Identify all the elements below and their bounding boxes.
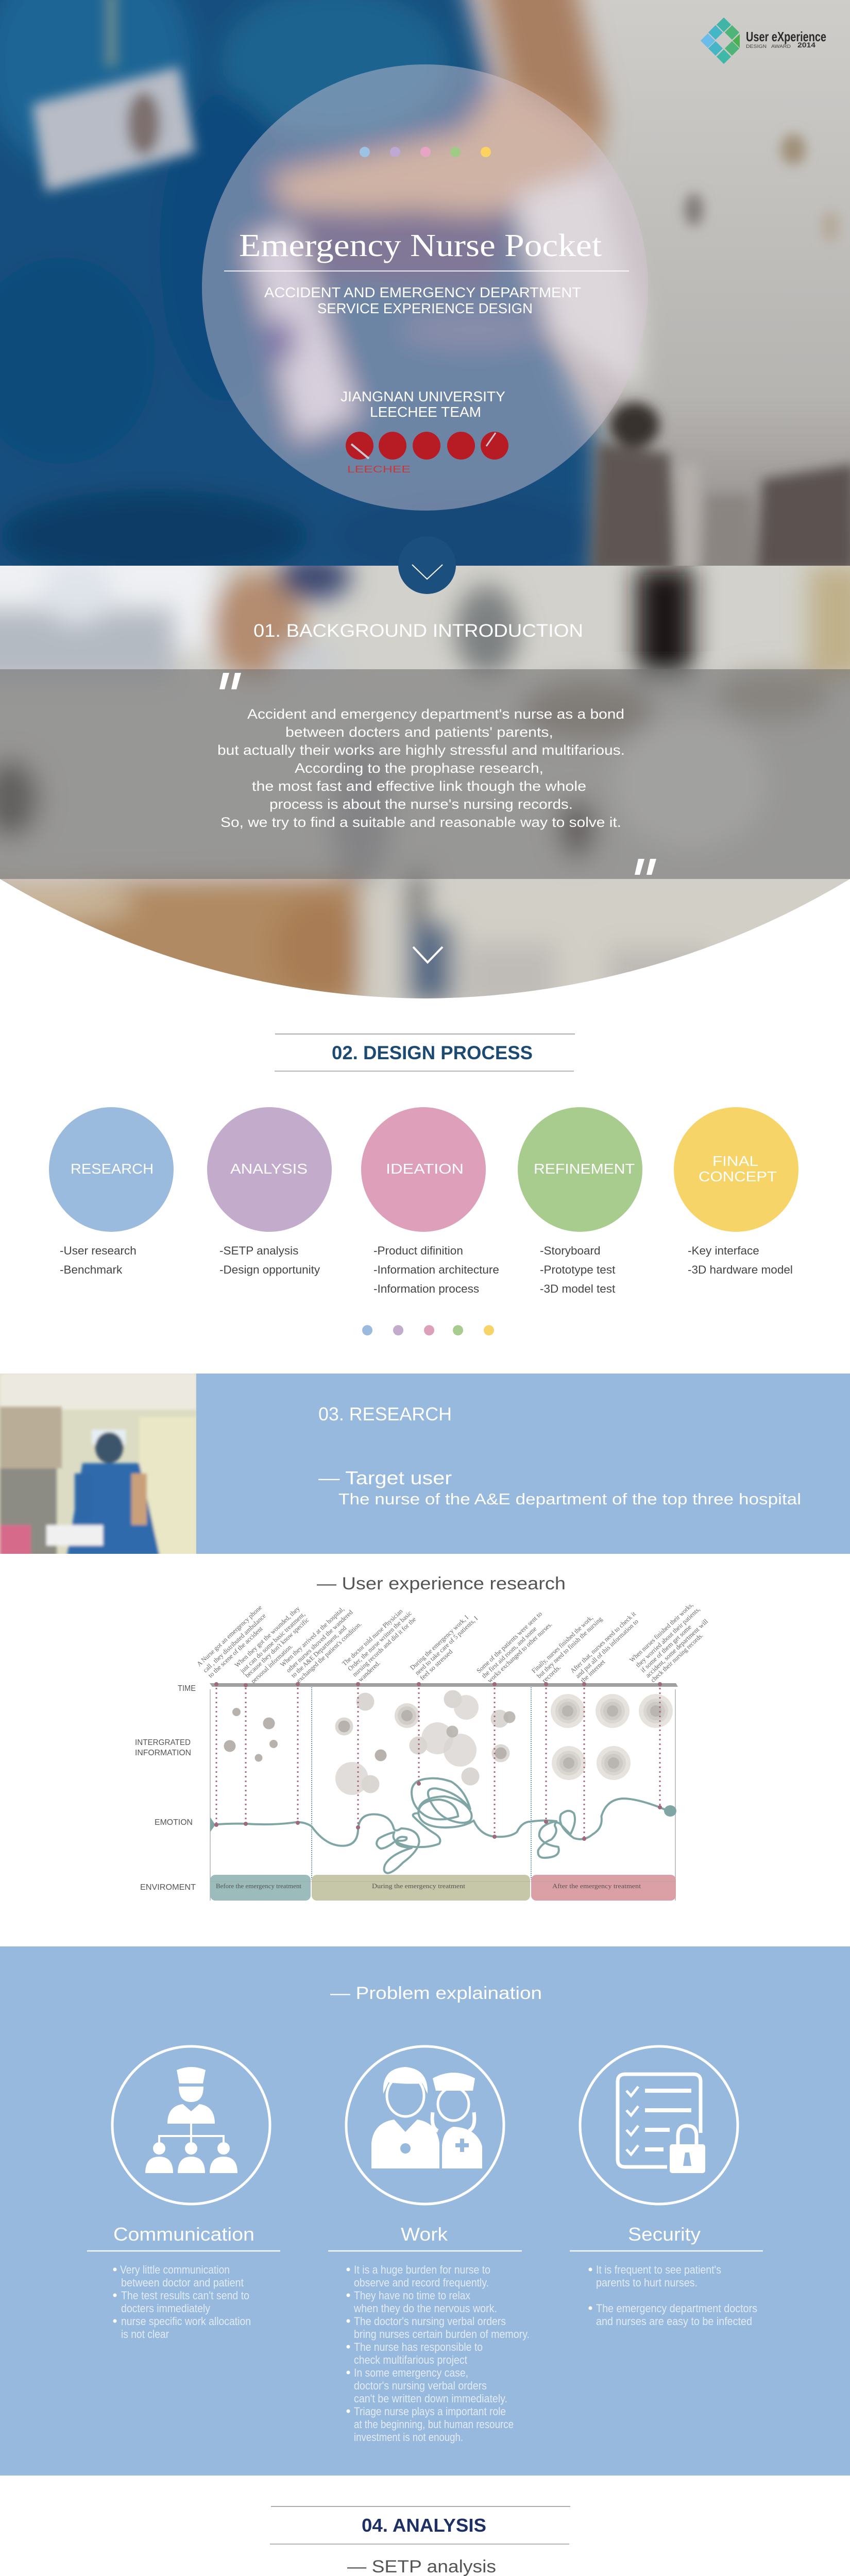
column: work [328,2224,530,2444]
integrated information bubbles [224,1690,673,1795]
step: research [49,1107,174,1232]
column: work: when they do the nervous work. [353,2302,497,2315]
research details: -Benchmark [60,1263,123,1276]
event annotations: personal information. [249,1642,294,1685]
ideation details: -Information process [373,1282,479,1295]
event annotations: but they need to finish the nursing [535,1615,604,1680]
icon: security [580,2046,738,2204]
column: communication: nurse specific work allocation [121,2315,251,2328]
translucent circle [202,64,648,511]
column: work: doctor's nursing verbal orders [354,2379,487,2392]
final concept details: -Key interface [688,1244,759,1257]
final concept details [688,1244,793,1276]
column: security: Security [628,2224,701,2245]
step: ideation [361,1107,486,1232]
column: security: and nurses are easy to be infected [596,2315,752,2328]
event annotations: because they don't know specific [243,1616,311,1679]
column: work: bring nurses certain burden of memory. [354,2328,530,2341]
icon: down chevron [413,947,443,962]
refinement details: -Storyboard [540,1244,601,1257]
row labels: ENVIROMENT [140,1883,196,1892]
ideation details [373,1244,499,1295]
event annotations: exchanged the patient's condition. [295,1620,363,1684]
row labels: TIME [178,1684,196,1693]
column: communication: docters immediately [121,2302,210,2315]
top chevron badge [398,536,456,594]
photo: nurse at work [0,1374,196,1556]
column: security [570,2224,763,2328]
event annotations: The doctor told nurse Physician [341,1607,404,1667]
heading: 02 design process: 02. DESIGN PROCESS [332,1042,533,1063]
step: analysis: ANALYSIS [230,1161,308,1177]
icon: User eXperience Design Award logo: 2014 [797,41,815,49]
row labels: INFORMATION [135,1749,191,1757]
column: work: can't be written down immediately. [354,2392,507,2405]
column: security: It is frequent to see patient's [596,2263,721,2276]
target user description: The nurse of the A&E department of the top three hospital [338,1490,801,1508]
frame lines [210,1687,675,1901]
environment bars [210,1875,676,1901]
event annotations: accident, some department will [644,1617,709,1679]
refinement details [540,1244,616,1295]
column: communication: is not clear [121,2328,169,2341]
chart: user experience journey map [135,1601,709,1901]
event annotations: feel so stressed [418,1648,454,1682]
event annotations: wandered. [356,1659,382,1683]
event annotations: the first aid room, and some [480,1625,538,1680]
environment bars: After the emergency treatment [552,1882,641,1890]
section photo background [0,546,850,1015]
emotion curve [210,1778,676,1873]
event annotations: works exchanged to other nurses. [486,1620,553,1684]
event annotations: if some of them get some [639,1623,693,1674]
column: work: observe and record frequently. [354,2276,489,2289]
column: work: They have no time to relax [354,2289,470,2302]
column: communication: The test results can't send to [121,2289,249,2302]
icon: work [346,2046,504,2204]
research details: -User research [60,1244,137,1257]
panel: 04 analysis [79,2506,806,2576]
event annotations: they worried about their patients, [634,1605,702,1669]
title: Emergency Nurse Pocket [239,228,602,263]
step: analysis [207,1107,332,1232]
icon: User eXperience Design Award logo: AWARD [771,44,791,49]
panel: 03 research banner [0,1374,850,1556]
background text: the most fast and effective link though the whole [252,778,586,794]
icon: opening quote mark [219,673,241,689]
column: work: Work [401,2224,448,2245]
background text: Accident and emergency department's nurse as a bond [247,706,624,722]
final concept details: -3D hardware model [688,1263,793,1276]
background text: So, we try to find a suitable and reasonable way to solve it. [220,815,621,830]
event annotations: other nurses shoved the wandered [284,1608,354,1674]
step: final concept: CONCEPT [699,1168,777,1184]
icon: closing quote mark [635,859,656,875]
event annotations: When nurses finished their works, [628,1601,694,1664]
time axis with event markers [210,1682,678,1841]
icon: User eXperience Design Award logo: User eXperience [746,29,826,44]
grey text band [0,669,850,879]
event annotations: Order, the nurse written the basic [346,1609,413,1672]
subtitle: SERVICE EXPERIENCE DESIGN [317,300,533,316]
step: research: RESEARCH [71,1161,154,1177]
event annotations: to the A&E Department, and [290,1624,348,1679]
panel: hero [0,0,850,618]
event annotations: records. [540,1663,562,1684]
team credit [341,388,505,420]
subtitle: ACCIDENT AND EMERGENCY DEPARTMENT [264,284,581,300]
step: refinement [518,1107,642,1232]
five coloured dots [362,1325,494,1335]
column: work: check multifarious project [354,2353,467,2366]
icon: Leechee logo [346,432,508,474]
panel: 01 background introduction [0,536,850,1015]
row labels: EMOTION [155,1818,193,1827]
analysis details [219,1244,320,1276]
event annotations: When they arrived at the hospital, [279,1605,346,1668]
ideation details: -Information architecture [373,1263,499,1276]
event annotations: just can do some basic treatment, [238,1610,307,1675]
event annotations: During the emergency work, I [409,1614,470,1671]
target user label: — Target user [318,1467,452,1488]
event annotations: Some of the patients were sent to [475,1610,543,1674]
column: communication: between doctor and patient [121,2276,244,2289]
environment bars: Before the emergency treatment [216,1882,301,1890]
research details [60,1244,137,1276]
column: work: Triage nurse plays a important role [354,2405,506,2418]
column: security: parents to hurt nurses. [596,2276,698,2289]
event annotations: After that, nurses need to check it [569,1609,637,1674]
background text: process is about the nurse's nursing records. [269,796,573,812]
icon: communication [112,2046,270,2204]
event annotations: to the scene of the accident [207,1624,264,1679]
background text: According to the prophase research, [295,760,543,776]
refinement details: -Prototype test [540,1263,616,1276]
event annotations: the internet [579,1658,606,1684]
background text: but actually their works are highly stressful and multifarious. [217,742,625,758]
column: work: The nurse has responsible to [354,2341,483,2353]
panel: problem explanation [0,1946,850,2476]
subtitle [264,284,581,316]
event annotations: nursing records and did it for the [351,1615,417,1678]
environment bars: During the emergency treatment [372,1882,465,1890]
step: refinement: REFINEMENT [534,1161,635,1177]
heading: 04 analysis: 04. ANALYSIS [362,2515,486,2536]
column: security: The emergency department doctors [596,2302,757,2315]
event annotations: check their nursing records. [649,1632,704,1684]
icon: User eXperience Design Award logo [701,18,826,64]
column: work: In some emergency case, [354,2366,468,2379]
column: communication: Communication [113,2224,254,2245]
event annotations: and put all of this information to [574,1617,640,1680]
heading: user experience research: — User experience research [317,1574,566,1594]
ideation details: -Product difinition [373,1244,463,1257]
event annotations [195,1601,709,1685]
step: ideation: IDEATION [386,1161,464,1177]
event annotations: call , they distributed ambulance [201,1612,267,1674]
column: communication: Very little communication [120,2263,230,2276]
team credit: JIANGNAN UNIVERSITY [341,388,505,404]
event annotations: A Nurse got an emergency phone [195,1603,263,1668]
panel: 02 design process [49,1034,798,1335]
column: work: investment is not enough. [354,2431,463,2444]
column: work: It is a huge burden for nurse to [354,2263,490,2276]
row labels [135,1684,196,1892]
analysis details: -SETP analysis [219,1244,298,1257]
team credit: LEECHEE TEAM [370,404,481,420]
row labels: INTERGRATED [135,1738,191,1747]
column: communication [87,2224,280,2341]
subheading: SETP analysis: — SETP analysis [347,2557,496,2576]
background text [217,706,625,830]
analysis details: -Design opportunity [219,1263,320,1276]
heading: 03 research: 03. RESEARCH [318,1403,452,1425]
heading: problem explaination: — Problem explaination [330,1984,542,2003]
column: work: at the beginning, but human resource [354,2418,514,2431]
five coloured dots [360,147,491,157]
step: final concept: FINAL [712,1153,758,1169]
event annotations: When they got the wounded, they [233,1604,301,1669]
event annotations: need to take care of 5 patients, I [413,1614,479,1676]
column: work: The doctor's nursing verbal orders [354,2315,506,2328]
icon: Leechee logo: LEECHEE [347,464,411,474]
step: final concept [674,1107,798,1232]
background text: between docters and patients' parents, [285,724,553,740]
heading: 01 background introduction: 01. BACKGROUND INTRODUCTION [253,621,583,641]
refinement details: -3D model test [540,1282,616,1295]
hero photo background [0,0,850,618]
icon: User eXperience Design Award logo: DESIGN [746,44,767,49]
event annotations: Finally, nurses finished the work, [530,1614,594,1674]
